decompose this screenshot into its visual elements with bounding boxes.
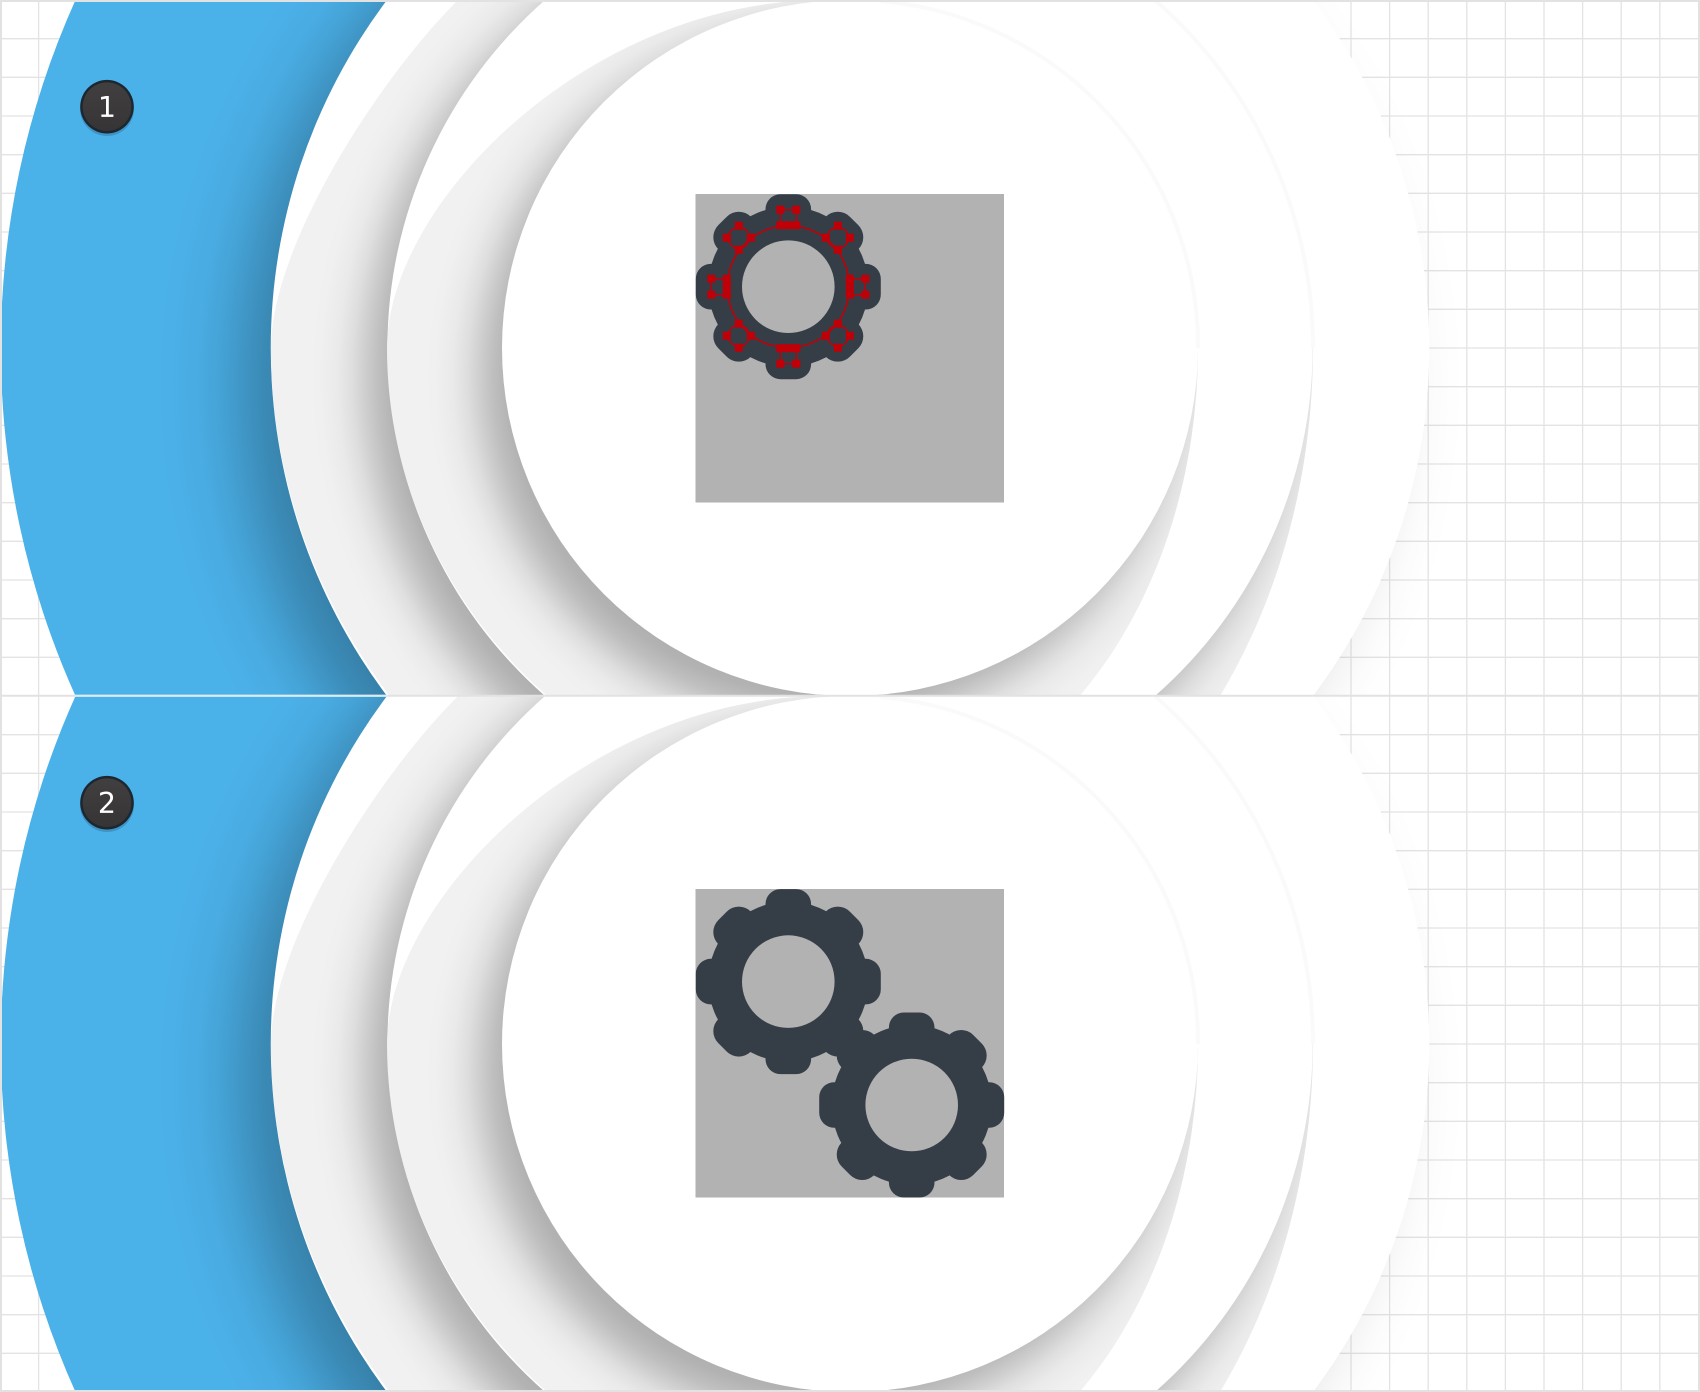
- grey shadow shape: outer ring: [271, 0, 1313, 696]
- grey shadow shape: inner ring: [387, 696, 1198, 1392]
- grey artboard square: [696, 194, 1004, 502]
- panel: step 1: [2, 2, 1430, 695]
- inner white circle: [502, 696, 1198, 1392]
- outer white circle: [271, 0, 1429, 696]
- panel: step 2: [2, 696, 1430, 1390]
- grey shadow shape: outer ring: [271, 696, 1313, 1392]
- grey shadow shape: inner ring: [387, 0, 1198, 696]
- red anchor points and paths: [707, 206, 869, 368]
- inner white circle: [502, 0, 1198, 696]
- icon: upper gear: [696, 889, 881, 1074]
- blue crescent: [1, 696, 850, 1392]
- blue crescent: [1, 0, 850, 696]
- middle white circle: [387, 696, 1313, 1392]
- outer circle shadow on grid: [1000, 0, 1700, 696]
- step badge 2: [80, 776, 134, 832]
- outer white circle: [271, 696, 1429, 1392]
- step badge 2: 2: [98, 787, 116, 820]
- step badge 1: [80, 80, 134, 136]
- step badge 1: 1: [98, 91, 116, 124]
- icon: lower gear: [819, 1012, 1004, 1198]
- outer circle shadow on grid: [1000, 696, 1700, 1392]
- middle white circle: [387, 0, 1313, 696]
- grey artboard square: [696, 889, 1004, 1198]
- icon: gear with anchor points: [696, 194, 881, 379]
